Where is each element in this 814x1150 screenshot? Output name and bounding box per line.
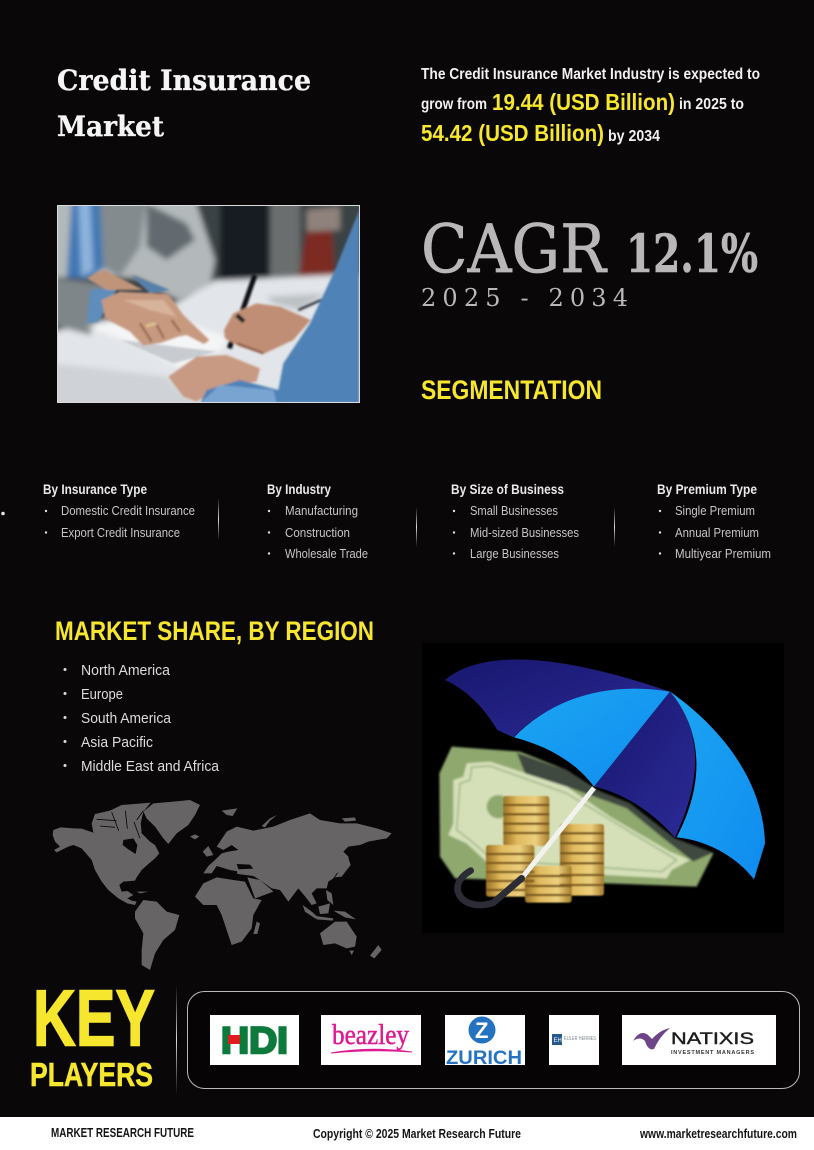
title (57, 64, 311, 143)
coin stacks (486, 796, 604, 903)
illustration: umbrella over money (422, 643, 784, 933)
column: by insurance type: By Insurance Type (43, 481, 147, 497)
column: by premium type (657, 481, 771, 561)
column: by industry (267, 481, 368, 561)
column: by industry: Wholesale Trade (285, 547, 368, 561)
column: by industry: Construction (285, 526, 350, 540)
market forecast text: grow from (421, 96, 487, 113)
column: by premium type: Single Premium (675, 504, 755, 518)
logo: Natixis (622, 1015, 776, 1065)
footer bar (0, 1117, 814, 1150)
logo: beazley: beazley (332, 1019, 409, 1051)
market forecast text: The Credit Insurance Market Industry is expected to (421, 66, 760, 83)
CAGR figure: 2025 - 2034 (421, 284, 628, 312)
logo: Zurich (445, 1015, 525, 1069)
world map (53, 800, 392, 970)
column: by size of business (451, 481, 579, 561)
photo: signing a document (53, 200, 363, 407)
banknote (439, 747, 713, 887)
market forecast text: in 2025 to (679, 96, 744, 113)
region list: North America (81, 662, 171, 679)
segmentation columns (43, 481, 771, 561)
CAGR figure: 12.1% (626, 224, 758, 285)
region list: Asia Pacific (81, 734, 153, 751)
logo: Zurich: Z (475, 1018, 488, 1043)
umbrella canopy (445, 660, 670, 737)
column: by size of business: Large Businesses (470, 547, 559, 561)
footer bar: MARKET RESEARCH FUTURE (51, 1126, 194, 1140)
column: by size of business: Mid-sized Businesses (470, 526, 579, 540)
market forecast text (421, 66, 760, 146)
stray bullet (1, 512, 5, 515)
key players heading: PLAYERS (30, 1057, 153, 1094)
column: by insurance type: Domestic Credit Insurance (61, 504, 195, 518)
column: by industry: Manufacturing (285, 504, 358, 518)
column: by premium type: Multiyear Premium (675, 547, 771, 561)
column: by premium type: Annual Premium (675, 526, 759, 540)
CAGR figure (421, 211, 758, 312)
market forecast text: 54.42 (USD Billion) (421, 120, 604, 146)
column: by premium type: By Premium Type (657, 481, 757, 497)
market forecast text: 19.44 (USD Billion) (492, 89, 675, 115)
column: by insurance type (43, 481, 195, 540)
column: by size of business: By Size of Business (451, 481, 564, 497)
title: Credit Insurance (57, 64, 311, 97)
logo: beazley (321, 1015, 421, 1065)
logo: Natixis: INVESTMENT MANAGERS (671, 1050, 754, 1056)
market share heading: MARKET SHARE, BY REGION (55, 616, 374, 646)
logo: Euler Hermes: EH (554, 1038, 562, 1044)
region list: South America (81, 710, 172, 727)
footer bar: Copyright © 2025 Market Research Future (313, 1127, 521, 1141)
key players heading (30, 974, 155, 1094)
umbrella shaft and handle (522, 788, 594, 878)
key players heading: KEY (33, 974, 155, 1062)
CAGR figure: CAGR (421, 211, 608, 288)
column: by industry: By Industry (267, 481, 331, 497)
title: Market (57, 110, 164, 143)
segmentation heading: SEGMENTATION (421, 375, 602, 405)
region list: Middle East and Africa (81, 758, 220, 775)
logo: Natixis: NATIXIS (671, 1029, 754, 1048)
column: by size of business: Small Businesses (470, 504, 558, 518)
logo: Euler Hermes: EULER HERMES (564, 1036, 597, 1042)
column: by insurance type: Export Credit Insurance (61, 526, 180, 540)
region list: Europe (81, 686, 123, 703)
logo: HDI: HDI (221, 1020, 288, 1061)
logo: Euler Hermes (549, 1015, 599, 1065)
region list (64, 662, 220, 775)
key players panel (188, 992, 800, 1088)
logo: Zurich: ZURICH (446, 1048, 522, 1069)
logo: HDI (210, 1015, 299, 1065)
market forecast text: by 2034 (608, 128, 660, 145)
